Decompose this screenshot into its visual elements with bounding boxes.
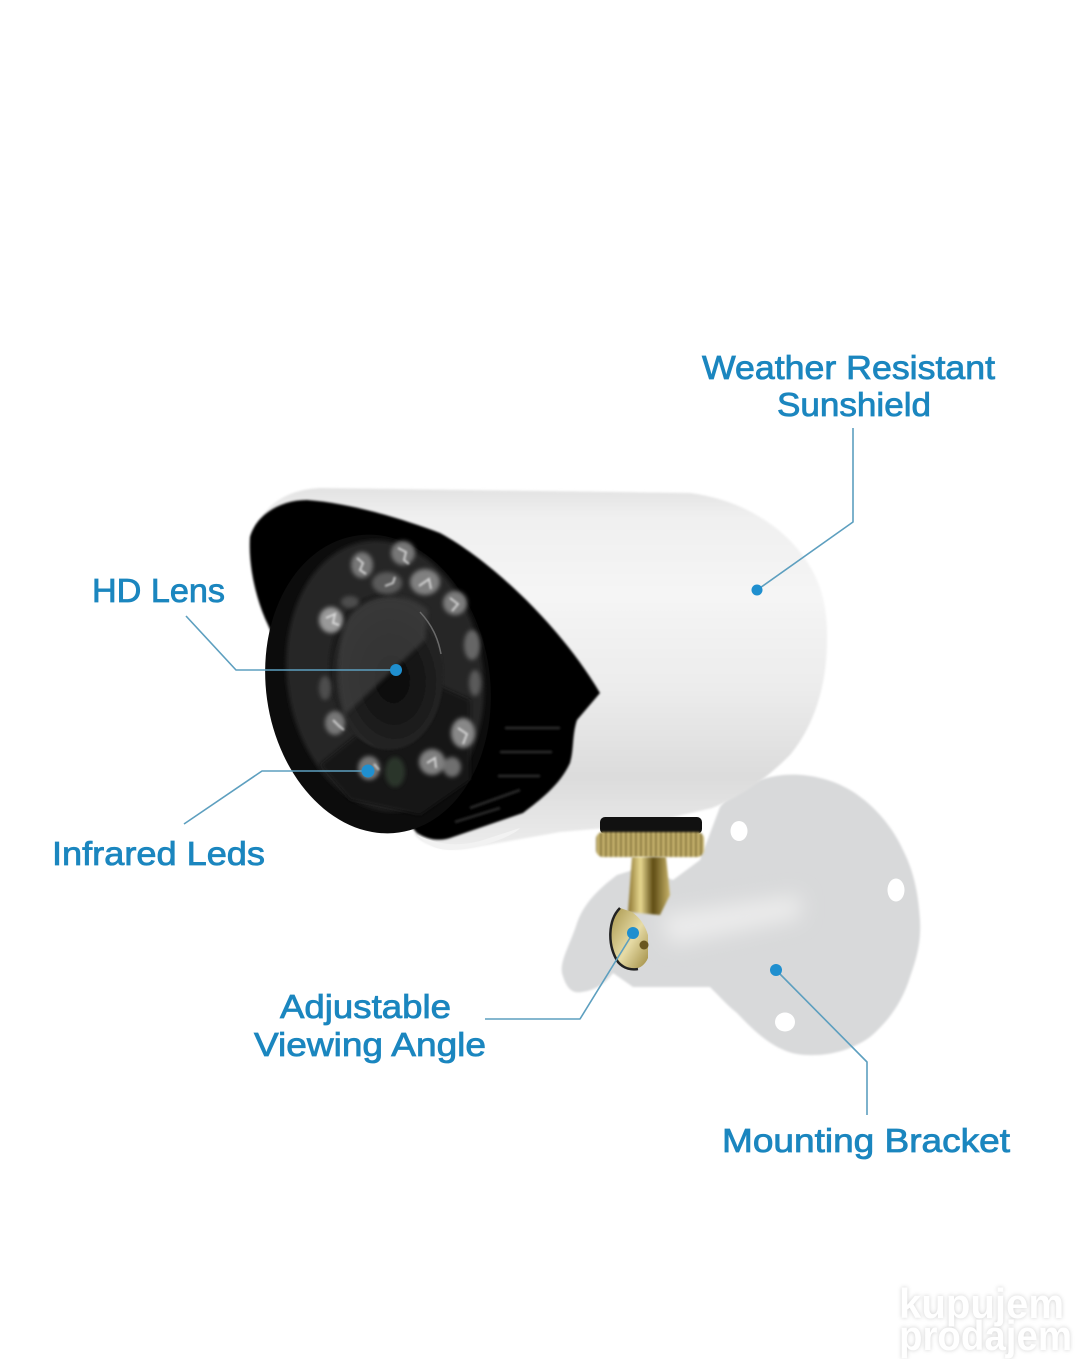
watermark: kupujem bbox=[899, 1280, 1064, 1327]
LED highlights bbox=[326, 548, 467, 770]
callout dots bbox=[362, 584, 782, 976]
label: Weather Resistant Sunshield bbox=[702, 349, 995, 423]
label: Adjustable Viewing Angle bbox=[254, 988, 486, 1063]
label: HD Lens: HD Lens bbox=[92, 572, 225, 609]
label: Adjustable Viewing Angle: Adjustable bbox=[280, 988, 451, 1025]
label: Adjustable Viewing Angle: Viewing Angle bbox=[254, 1026, 486, 1063]
watermark bbox=[899, 1280, 1072, 1359]
label: Weather Resistant Sunshield: Weather Resistant bbox=[702, 349, 995, 386]
front face bbox=[246, 520, 510, 848]
camera housing bbox=[250, 488, 827, 849]
lens bbox=[322, 589, 450, 755]
callout leader lines bbox=[184, 428, 867, 1115]
sunshield shadow and front opening bbox=[250, 500, 600, 840]
infrared LEDs bbox=[319, 541, 481, 787]
lower lens barrel ribs bbox=[455, 728, 560, 822]
dark lower reflection bbox=[320, 680, 470, 815]
camera illustration bbox=[246, 488, 920, 1055]
mounting bracket bbox=[562, 775, 920, 1055]
white ring below sunshield bbox=[417, 828, 520, 850]
label: Infrared Leds: Infrared Leds bbox=[52, 835, 265, 872]
label: Weather Resistant Sunshield: Sunshield bbox=[777, 386, 931, 423]
brass mount bbox=[596, 817, 704, 969]
label: Mounting Bracket: Mounting Bracket bbox=[722, 1122, 1010, 1159]
